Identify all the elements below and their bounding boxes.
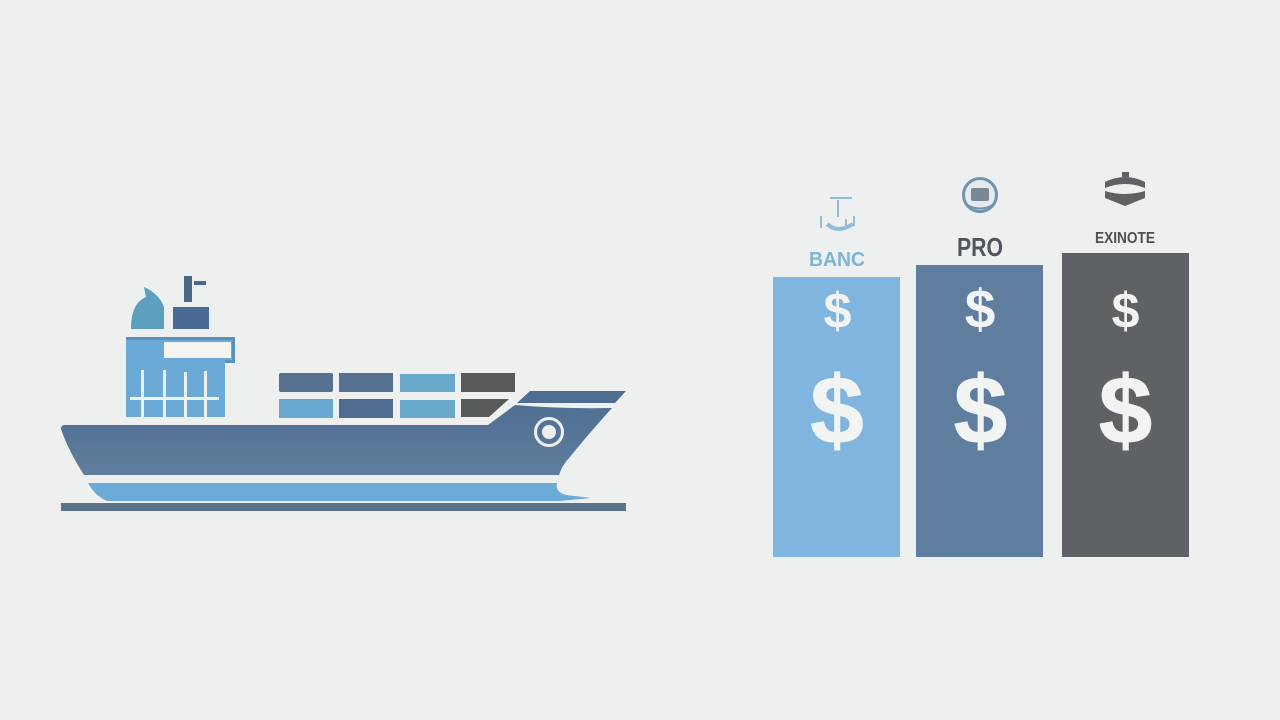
tier: pro <box>916 178 1043 557</box>
porthole <box>536 418 562 446</box>
bar: executive <box>1062 253 1189 557</box>
bar: basic <box>773 277 900 557</box>
superstructure railings <box>130 370 219 418</box>
small dollar: basic: $ <box>824 283 852 339</box>
small dollar: pro: $ <box>965 278 995 340</box>
ship hull <box>61 405 612 475</box>
bow deck <box>517 391 626 403</box>
label: basic: BANC <box>809 249 865 271</box>
large dollar: pro: $ <box>954 357 1007 464</box>
ship mast and flag <box>184 276 206 302</box>
base line <box>61 503 626 511</box>
bridge border <box>126 337 235 363</box>
large dollar: basic: $ <box>810 357 864 464</box>
icon: pro tier globe <box>964 178 996 212</box>
label: pro: PRO <box>957 232 1003 262</box>
bar: pro <box>916 265 1043 557</box>
waterline stripe <box>88 483 591 501</box>
tier: executive <box>1062 172 1189 557</box>
bridge block <box>173 307 209 329</box>
ship funnel <box>131 287 164 329</box>
superstructure <box>126 337 235 418</box>
icon: executive tier ship <box>1105 172 1145 206</box>
large dollar: executive: $ <box>1099 357 1152 464</box>
bridge window <box>164 342 231 358</box>
tier: basic <box>773 198 900 557</box>
icon: basic tier ship <box>821 198 854 229</box>
illustration: container ship <box>61 276 626 511</box>
panel: price tier bars <box>773 172 1189 557</box>
container stack <box>279 373 515 418</box>
label: executive: EXINOTE <box>1095 230 1155 247</box>
small dollar: executive: $ <box>1112 283 1140 339</box>
